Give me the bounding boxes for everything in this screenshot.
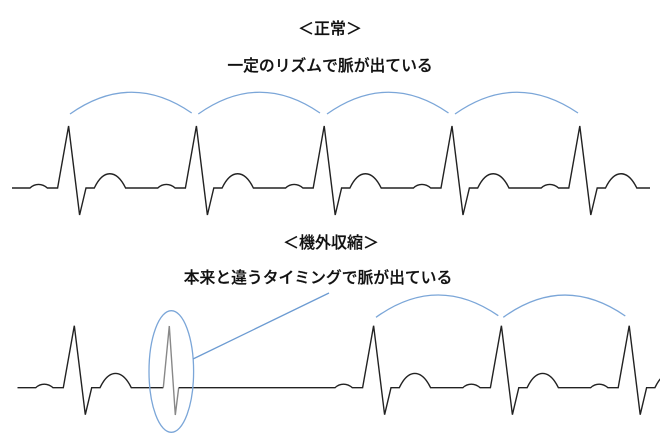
callout: ellipse around premature beat xyxy=(149,311,194,432)
text: normal description: 一定のリズムで脈が出ている xyxy=(227,58,433,75)
ECG trace: premature beat xyxy=(163,326,179,415)
ECG trace: pause and following beats xyxy=(179,326,660,415)
arcs: resumed beat intervals xyxy=(376,295,625,317)
ECG trace: normal rhythm xyxy=(12,126,650,215)
heading: normal: ＜正常＞ xyxy=(298,21,362,38)
callout: leader line to description xyxy=(193,293,329,359)
text: premature contraction description: 本来と違うタイミングで脈が出ている xyxy=(184,270,452,287)
ECG trace: first normal beat xyxy=(18,326,163,415)
heading: premature contraction: ＜機外収縮＞ xyxy=(283,235,379,252)
arcs: regular beat intervals xyxy=(70,92,578,114)
